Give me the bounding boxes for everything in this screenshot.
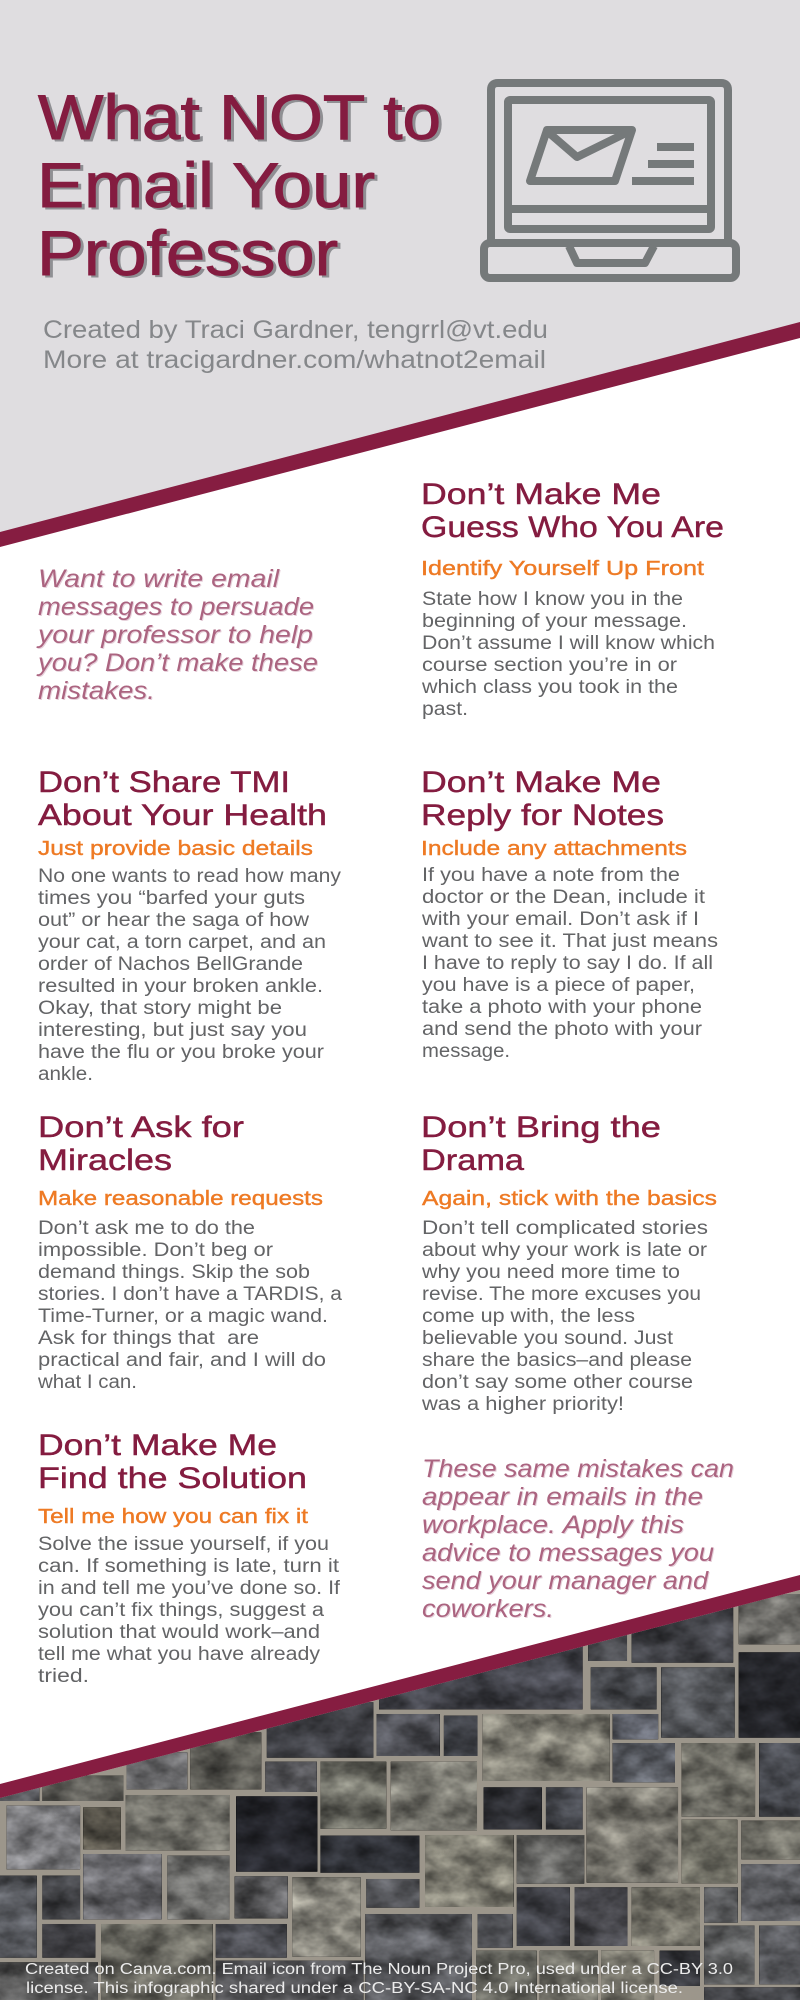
body text: Time-Turner, or a magic wand. <box>38 1306 328 1327</box>
body text: No one wants to read how many <box>38 866 342 887</box>
body text: solution that would work–and <box>38 1622 320 1643</box>
body text <box>38 866 342 1085</box>
heading <box>421 478 724 544</box>
body text: you have is a piece of paper, <box>422 975 695 996</box>
body text: Okay, that story might be <box>38 998 282 1019</box>
top diagonal band <box>0 322 800 547</box>
heading: Guess Who You Are <box>421 511 724 544</box>
heading: Find the Solution <box>38 1462 307 1495</box>
body text: Don’t ask me to do the <box>38 1218 255 1239</box>
body text: what I can. <box>37 1372 137 1393</box>
body text: impossible. Don’t beg or <box>38 1240 274 1261</box>
closing callout: workplace. Apply this <box>422 1511 684 1539</box>
body text: want to see it. That just means <box>421 931 718 952</box>
icon: laptop with email <box>484 83 736 278</box>
intro callout: Want to write email <box>38 565 281 593</box>
body text: your cat, a torn carpet, and an <box>38 932 326 953</box>
body text: State how I know you in the <box>422 589 683 610</box>
body text: Solve the issue yourself, if you <box>38 1534 329 1555</box>
heading: Don’t Bring the <box>421 1111 661 1144</box>
panel: reply for notes <box>421 766 718 1062</box>
body text: you can’t fix things, suggest a <box>38 1600 324 1621</box>
body text: resulted in your broken ankle. <box>38 976 323 997</box>
body text <box>421 1218 708 1415</box>
body text: times you “barfed your guts <box>38 888 305 909</box>
body text: why you need more time to <box>421 1262 680 1283</box>
closing callout: send your manager and <box>422 1567 709 1595</box>
bottom diagonal band <box>0 1575 800 1798</box>
body text: out” or hear the saga of how <box>38 910 309 931</box>
body text: order of Nachos BellGrande <box>38 954 303 975</box>
footer credit: Created on Canva.com. Email icon from The Noun Project Pro, used under a CC-BY 3.0 <box>25 1961 733 1978</box>
closing callout <box>422 1455 734 1623</box>
title: Professor <box>37 219 338 289</box>
body text: Don’t tell complicated stories <box>422 1218 708 1239</box>
panel: guess who you are <box>421 478 724 720</box>
body text: revise. The more excuses you <box>422 1284 701 1305</box>
body text: can. If something is late, turn it <box>38 1556 340 1577</box>
intro callout: messages to persuade <box>38 593 314 621</box>
panel: find the solution <box>38 1429 341 1687</box>
body text: stories. I don’t have a TARDIS, a <box>38 1284 342 1305</box>
heading: About Your Health <box>38 799 327 832</box>
intro callout: your professor to help <box>36 621 313 649</box>
body text: come up with, the less <box>422 1306 635 1327</box>
panel: miracles <box>37 1111 342 1393</box>
author credit <box>43 316 548 374</box>
subheading: Just provide basic details <box>38 837 313 860</box>
body text: I have to reply to say I do. If all <box>422 953 713 974</box>
body text: doctor or the Dean, include it <box>422 887 706 908</box>
body text: practical and fair, and I will do <box>38 1350 326 1371</box>
closing callout: advice to messages you <box>422 1539 714 1567</box>
body text <box>37 1218 342 1393</box>
body text: course section you’re in or <box>422 655 678 676</box>
closing callout: These same mistakes can <box>422 1455 734 1483</box>
footer credit <box>25 1961 733 1997</box>
body text: don’t say some other course <box>422 1372 693 1393</box>
heading <box>38 1111 244 1177</box>
body text: have the flu or you broke your <box>38 1042 325 1063</box>
heading: Don’t Share TMI <box>38 766 290 799</box>
title: Email Your <box>37 151 375 221</box>
body text <box>421 865 718 1062</box>
subheading: Again, stick with the basics <box>422 1187 717 1210</box>
subheading: Make reasonable requests <box>38 1187 323 1210</box>
heading: Miracles <box>38 1144 172 1177</box>
intro callout <box>36 565 318 705</box>
body text: with your email. Don’t ask if I <box>421 909 699 930</box>
body text: If you have a note from the <box>422 865 680 886</box>
body text <box>38 1534 341 1687</box>
author credit: Created by Traci Gardner, tengrrl@vt.edu <box>43 316 548 344</box>
panel: TMI health <box>38 766 342 1085</box>
heading <box>38 766 327 832</box>
heading: Don’t Make Me <box>421 766 661 799</box>
heading: Drama <box>421 1144 524 1177</box>
heading <box>38 1429 307 1495</box>
panel: drama <box>421 1111 717 1415</box>
intro callout: mistakes. <box>38 677 155 705</box>
body text: about why your work is late or <box>422 1240 708 1261</box>
closing callout: appear in emails in the <box>422 1483 703 1511</box>
heading: Don’t Make Me <box>38 1429 277 1462</box>
heading: Don’t Make Me <box>421 478 661 511</box>
subheading: Identify Yourself Up Front <box>421 557 704 580</box>
body text: message. <box>422 1041 510 1062</box>
body text: beginning of your message. <box>422 611 687 632</box>
intro callout: you? Don’t make these <box>36 649 318 677</box>
body text: was a higher priority! <box>421 1394 624 1415</box>
body text: and send the photo with your <box>422 1019 703 1040</box>
body text: take a photo with your phone <box>422 997 702 1018</box>
footer credit: license. This infographic shared under a CC-BY-SA-NC 4.0 International license. <box>26 1980 683 1997</box>
body text: past. <box>422 699 468 720</box>
header grey background <box>0 0 800 534</box>
body text: in and tell me you’ve done so. If <box>38 1578 341 1599</box>
body text: ankle. <box>38 1064 93 1085</box>
subheading: Include any attachments <box>421 837 687 860</box>
heading: Don’t Ask for <box>38 1111 244 1144</box>
body text: tried. <box>38 1666 89 1687</box>
author credit: More at tracigardner.com/whatnot2email <box>43 346 546 374</box>
body text: interesting, but just say you <box>38 1020 307 1041</box>
closing callout: coworkers. <box>422 1595 554 1623</box>
body text <box>421 589 715 720</box>
heading: Reply for Notes <box>421 799 664 832</box>
title: What NOT to <box>38 83 441 153</box>
subheading: Tell me how you can fix it <box>38 1505 308 1528</box>
body text: share the basics–and please <box>422 1350 692 1371</box>
body text: Don’t assume I will know which <box>422 633 715 654</box>
stone wall background <box>0 1570 800 2000</box>
body text: demand things. Skip the sob <box>38 1262 310 1283</box>
body text: Ask for things that are <box>38 1328 259 1349</box>
title <box>37 83 441 289</box>
body text: believable you sound. Just <box>422 1328 674 1349</box>
body text: which class you took in the <box>421 677 678 698</box>
heading <box>421 1111 661 1177</box>
heading <box>421 766 664 832</box>
body text: tell me what you have already <box>38 1644 321 1665</box>
